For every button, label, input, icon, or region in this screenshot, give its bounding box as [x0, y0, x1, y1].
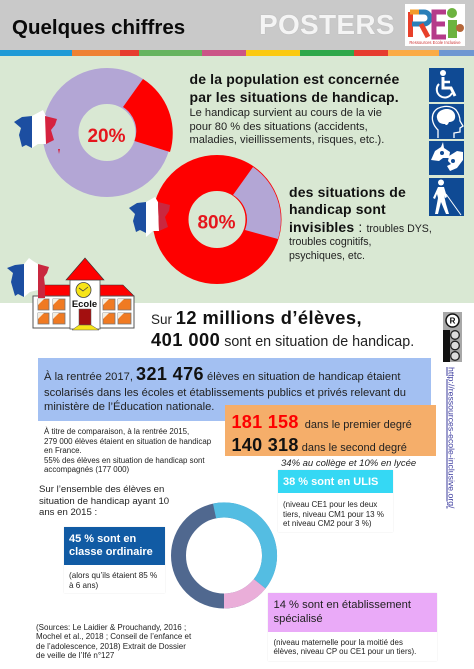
note: comparison: en France. [44, 446, 82, 455]
note: comparison: accompagnés (177 000) [44, 465, 129, 474]
icon: sign language [429, 141, 464, 175]
logo: REI: Ressources Ecole Inclusive [409, 40, 461, 45]
second degree: 140 318 dans le second degré [232, 435, 407, 455]
intro: ensemble des élèves: situation de handicap ayant 10 [39, 496, 169, 506]
explanation: pour 80 % des situations (accidents, [190, 120, 368, 132]
sources: (Sources: Le Laidier & Prouchandy, 2016 ; [36, 622, 186, 632]
note: comparison: 279 000 élèves étaient en situation de handicap [44, 436, 211, 446]
badge: creative commons: R [450, 316, 456, 326]
header band [0, 0, 474, 56]
icon: school building [32, 258, 135, 330]
text: ministère de l’Éducation nationale. [44, 400, 214, 412]
details: (alors qu’ils étaient 85 % [69, 571, 157, 580]
headline [190, 71, 399, 105]
icons: accessibility [429, 68, 464, 216]
sources: Mochel et al., 2018 ; Conseil de l’enfance et [36, 632, 191, 641]
details: (niveau maternelle pour la moitié des [274, 638, 403, 646]
panel: degrees [225, 405, 436, 456]
title: Quelques chiffres [12, 16, 185, 39]
clock [76, 282, 91, 298]
colour bar [0, 50, 474, 56]
details: et niveau CM2 pour 3 %) [283, 519, 372, 528]
sources [36, 622, 192, 660]
panel: ULIS [278, 470, 393, 532]
donut chart: 80% [154, 155, 282, 284]
heading [64, 527, 165, 565]
heading: 38 % sont en ULIS [283, 476, 378, 488]
intro: ensemble des élèves: Sur l’ensemble des élèves en [39, 484, 164, 495]
icon: France flag map 1 [14, 110, 60, 154]
first degree: 181 158 dans le premier degré [232, 412, 412, 432]
headline: handicap sont [289, 201, 386, 217]
details: à 6 ans) [69, 581, 98, 590]
text: À la rentrée 2017, 321 476 élèves en situation de handicap étaient [44, 364, 400, 384]
panel: établissement spécialisé [268, 593, 437, 661]
heading: 45 % sont en [69, 533, 136, 545]
explanation: maladies, vieillissements, risques, etc.). [190, 134, 384, 146]
text: scolarisés dans les écoles et établissements publics et privés relevant du [44, 386, 406, 398]
donut chart: distribution [171, 502, 278, 608]
icon: France flag map 2 [129, 197, 170, 237]
headline: invisibles : troubles DYS, [289, 218, 432, 234]
heading: spécialisé [274, 612, 323, 624]
panel: classe ordinaire [64, 527, 165, 593]
logo: REI [405, 4, 465, 46]
note: collège and lycée: 34% au collège et 10% en lycée [281, 458, 416, 468]
details: psychiques, etc. [289, 250, 365, 262]
heading: 14 % sont en établissement [274, 599, 411, 611]
details [69, 571, 157, 590]
donut chart: 20% [44, 68, 173, 197]
details [289, 236, 371, 262]
value: 80%: 80% [197, 212, 236, 234]
note: comparison: 55% des élèves en situation de handicap sont [44, 456, 205, 464]
text: invisibles [289, 184, 432, 262]
intro: ensemble des élèves: ans en 2015 : [39, 507, 97, 518]
intro: ensemble des élèves [39, 484, 169, 518]
school label: Ecole [72, 299, 97, 310]
note: comparison [44, 426, 211, 474]
details [283, 500, 384, 528]
details: tiers, niveau CM1 pour 13 % [283, 510, 384, 519]
line 1: Sur 12 millions d’élèves, [151, 307, 362, 328]
text: population [190, 71, 399, 146]
headline: par les situations de handicap. [190, 88, 399, 104]
details: (niveau CE1 pour les deux [283, 500, 377, 509]
line 2: 401 000 sont en situation de handicap. [151, 329, 414, 350]
headline: des situations de [289, 184, 406, 200]
explanation [190, 107, 384, 146]
green panel [0, 56, 474, 303]
heading [268, 593, 437, 632]
note: comparison: À titre de comparaison, à la rentrée 2015, [44, 427, 189, 436]
icon: person with white cane [429, 178, 464, 216]
text [44, 364, 406, 412]
icon: wheelchair [429, 68, 464, 102]
statement: 12 millions [151, 307, 414, 350]
icon: head and brain [429, 104, 464, 139]
details [274, 638, 416, 656]
panel: 321 476 [38, 358, 430, 420]
icon: France flag map 3 [7, 258, 49, 298]
explanation: Le handicap survient au cours de la vie [190, 107, 382, 119]
vertical url link: http://ressources-ecole-inclusive.org/ [446, 367, 456, 508]
details: élèves, niveau CP ou CE1 pour un tiers). [274, 647, 416, 656]
heading: classe ordinaire [69, 546, 153, 558]
heading [278, 470, 393, 493]
badge: creative commons [443, 312, 462, 362]
details: troubles cognitifs, [289, 236, 371, 248]
value: 20%: 20% [87, 126, 126, 147]
posters heading: POSTERS [259, 9, 395, 40]
sources: de veille de l’Ifé n°127 [36, 651, 114, 660]
headline [289, 184, 432, 234]
sources: de l’adolescence, 2018) Extrait de Dossier [36, 642, 186, 651]
headline: de la population est concernée [190, 71, 399, 87]
